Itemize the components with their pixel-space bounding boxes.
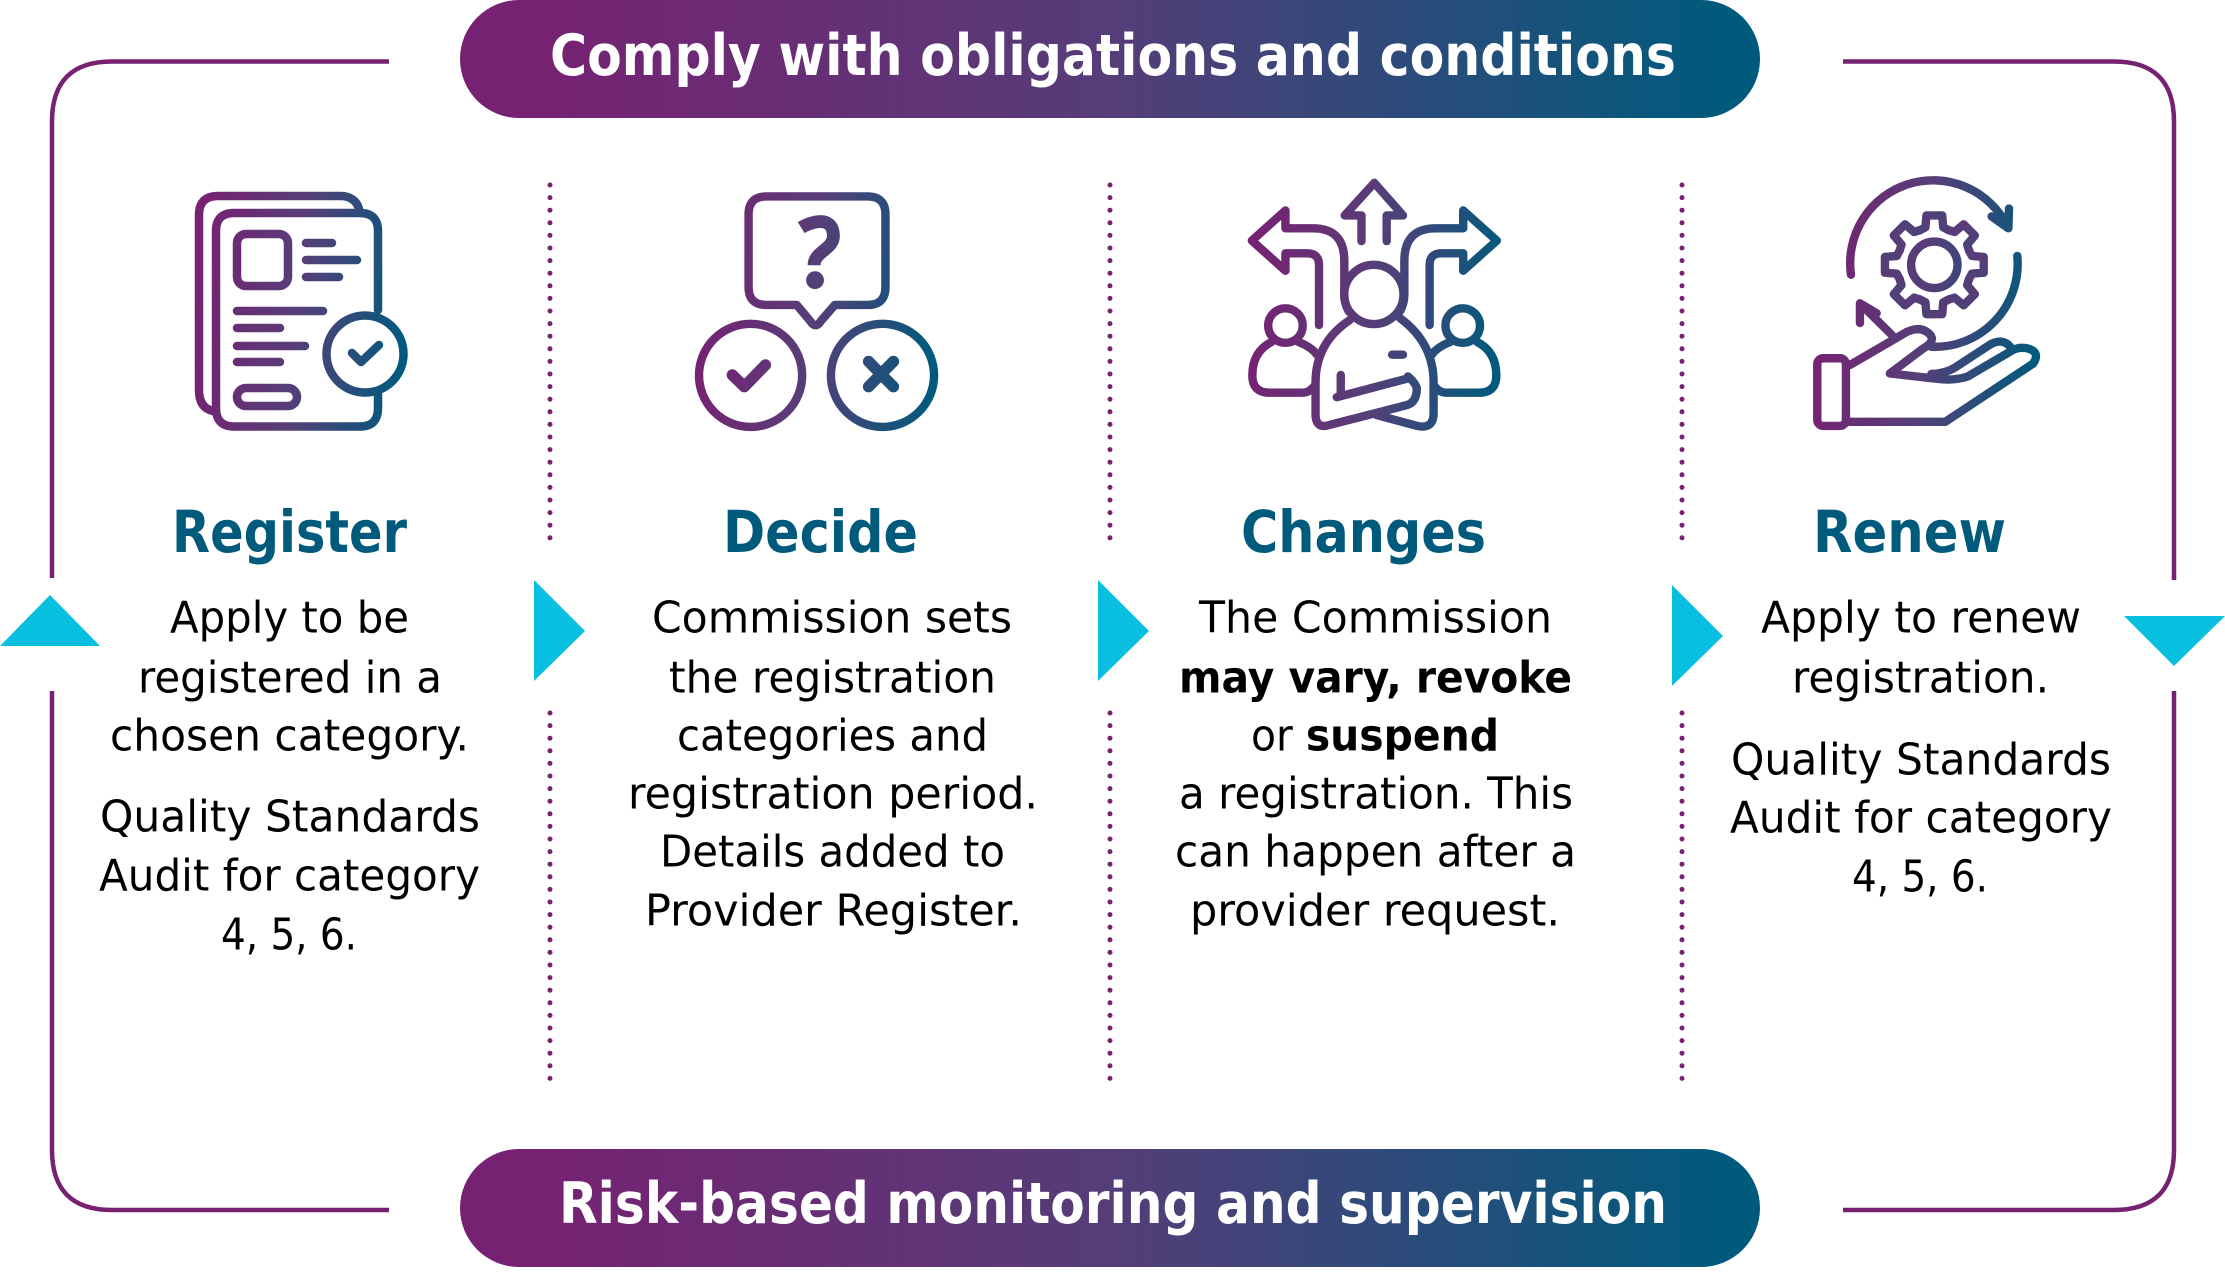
text: changes description: provider request. — [1190, 886, 1560, 936]
text: register description — [99, 592, 480, 960]
text: register description: Audit for category — [99, 850, 480, 902]
heading: register: Register — [172, 498, 407, 566]
text: register description: 4, 5, 6. — [221, 910, 357, 960]
arrow: register to decide — [534, 580, 585, 681]
icon: changes people and arrows — [1252, 183, 1497, 427]
text: register description: Apply to be — [170, 592, 409, 644]
text: renew description: Quality Standards — [1731, 734, 2111, 786]
arrow: changes to renew — [1672, 585, 1723, 686]
heading: decide: Decide — [723, 498, 918, 566]
text: changes description: may vary, revoke — [1179, 652, 1572, 704]
banner: risk-based monitoring — [460, 1149, 1760, 1267]
text: register description: Quality Standards — [100, 792, 480, 842]
text: renew description — [1730, 592, 2112, 902]
text: decide description: categories and — [677, 710, 988, 762]
text: changes description: The Commission — [1198, 592, 1552, 644]
banner: risk-based monitoring: Risk-based monitoring and supervision — [559, 1171, 1667, 1237]
text: renew description: 4, 5, 6. — [1852, 852, 1988, 902]
arrow: decide to changes — [1098, 580, 1149, 681]
arrow: cycle down on right — [2124, 616, 2225, 666]
cycle frame: right side — [1843, 62, 2174, 1210]
text: renew description: Apply to renew — [1761, 592, 2081, 644]
text: decide description: Provider Register. — [645, 886, 1022, 936]
heading: renew: Renew — [1813, 498, 2006, 566]
text: decide description: Commission sets — [652, 592, 1012, 644]
text: decide description — [628, 592, 1038, 936]
banner: comply with obligations: Comply with obligations and conditions — [550, 23, 1676, 89]
heading: changes: Changes — [1241, 498, 1486, 566]
text: changes description: or suspend — [1251, 710, 1499, 762]
text: changes description: a registration. This — [1179, 768, 1573, 820]
text: decide description: Details added to — [660, 826, 1005, 878]
text: register description: registered in a — [138, 652, 442, 704]
icon: decide question and choices — [699, 196, 934, 427]
banner: comply with obligations — [460, 0, 1760, 118]
text: register description: chosen category. — [110, 710, 469, 762]
cycle frame: left side — [52, 62, 389, 1210]
text: renew description: Audit for category — [1730, 792, 2112, 844]
text: changes description: can happen after a — [1175, 826, 1576, 878]
text: changes description — [1175, 592, 1576, 936]
icon: renew gear in hand — [1817, 180, 2036, 426]
text: decide description: the registration — [669, 652, 996, 704]
arrow: cycle up on left — [0, 595, 100, 646]
text: decide description: registration period. — [628, 768, 1038, 820]
icon: register document — [199, 196, 404, 426]
text: renew description: registration. — [1792, 652, 2049, 704]
